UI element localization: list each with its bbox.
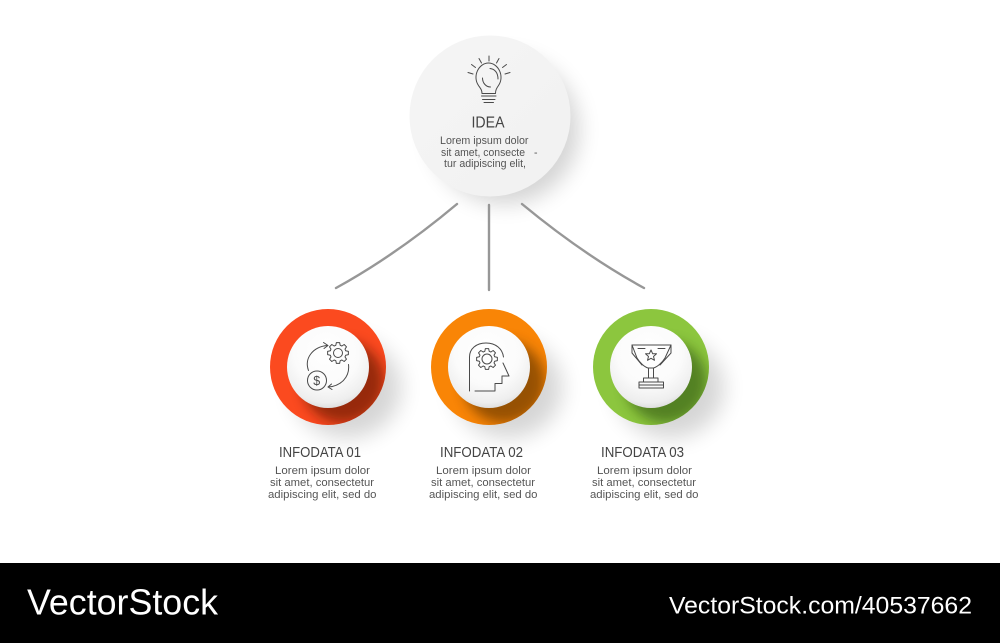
white ball: [610, 326, 692, 408]
text: idea description: -: [534, 147, 538, 159]
icon: gear and dollar cycle: [307, 342, 349, 390]
panel: idea circle: [410, 36, 579, 204]
outer shadow: [616, 338, 724, 438]
ring inner shadow: [625, 341, 707, 423]
footer url text: VectorStock.com/40537662: [669, 592, 972, 620]
text: idea description: tur adipiscing elit,: [444, 158, 526, 170]
text: idea description: sit amet, consecte: [441, 147, 525, 159]
text: idea description: Lorem ipsum dolor: [440, 135, 529, 147]
text: infodata 02 description: adipiscing elit, sed do: [429, 489, 538, 501]
icon: trophy: [632, 345, 671, 388]
panel: infodata 02: [429, 309, 562, 501]
connector: left curve: [336, 204, 457, 288]
label: infodata 03: INFODATA 03: [601, 444, 684, 461]
panel: infodata 03: [590, 309, 724, 501]
icon: light bulb: [468, 56, 510, 102]
idea circle disc: [410, 36, 570, 196]
text: infodata 02 description: [429, 465, 538, 501]
green ring: [593, 309, 709, 425]
text: infodata 01 description: Lorem ipsum dolor: [275, 465, 371, 477]
outer shadow: [454, 338, 562, 438]
orange ring: [431, 309, 547, 425]
idea circle shadow: [431, 56, 579, 204]
text: idea description: [440, 135, 538, 170]
icon: head with gear: [470, 343, 509, 391]
connector: right curve: [522, 204, 644, 288]
footer bar: [0, 563, 1000, 643]
heading: idea: IDEA: [472, 114, 505, 132]
text: infodata 03 description: adipiscing elit, sed do: [590, 489, 699, 501]
white ball: [287, 326, 369, 408]
text: infodata 02 description: sit amet, consectetur: [431, 477, 535, 489]
text: infodata 03 description: Lorem ipsum dolor: [597, 465, 693, 477]
icon: gear and dollar cycle: $: [313, 374, 320, 388]
ring inner shadow: [302, 341, 384, 423]
label: infodata 01: INFODATA 01: [279, 444, 361, 461]
white ball: [448, 326, 530, 408]
label: infodata 02: INFODATA 02: [440, 444, 523, 461]
red ring: [270, 309, 386, 425]
panel: infodata 01: [268, 309, 401, 501]
outer shadow: [293, 338, 401, 438]
text: infodata 01 description: [268, 465, 377, 501]
text: infodata 01 description: adipiscing elit, sed do: [268, 489, 377, 501]
footer logo text: VectorStock: [27, 582, 219, 622]
text: infodata 01 description: sit amet, consectetur: [270, 477, 374, 489]
connector: middle line: [488, 205, 490, 290]
text: infodata 02 description: Lorem ipsum dolor: [436, 465, 532, 477]
text: infodata 03 description: sit amet, consectetur: [592, 477, 696, 489]
ring inner shadow: [463, 341, 545, 423]
text: infodata 03 description: [590, 465, 699, 501]
